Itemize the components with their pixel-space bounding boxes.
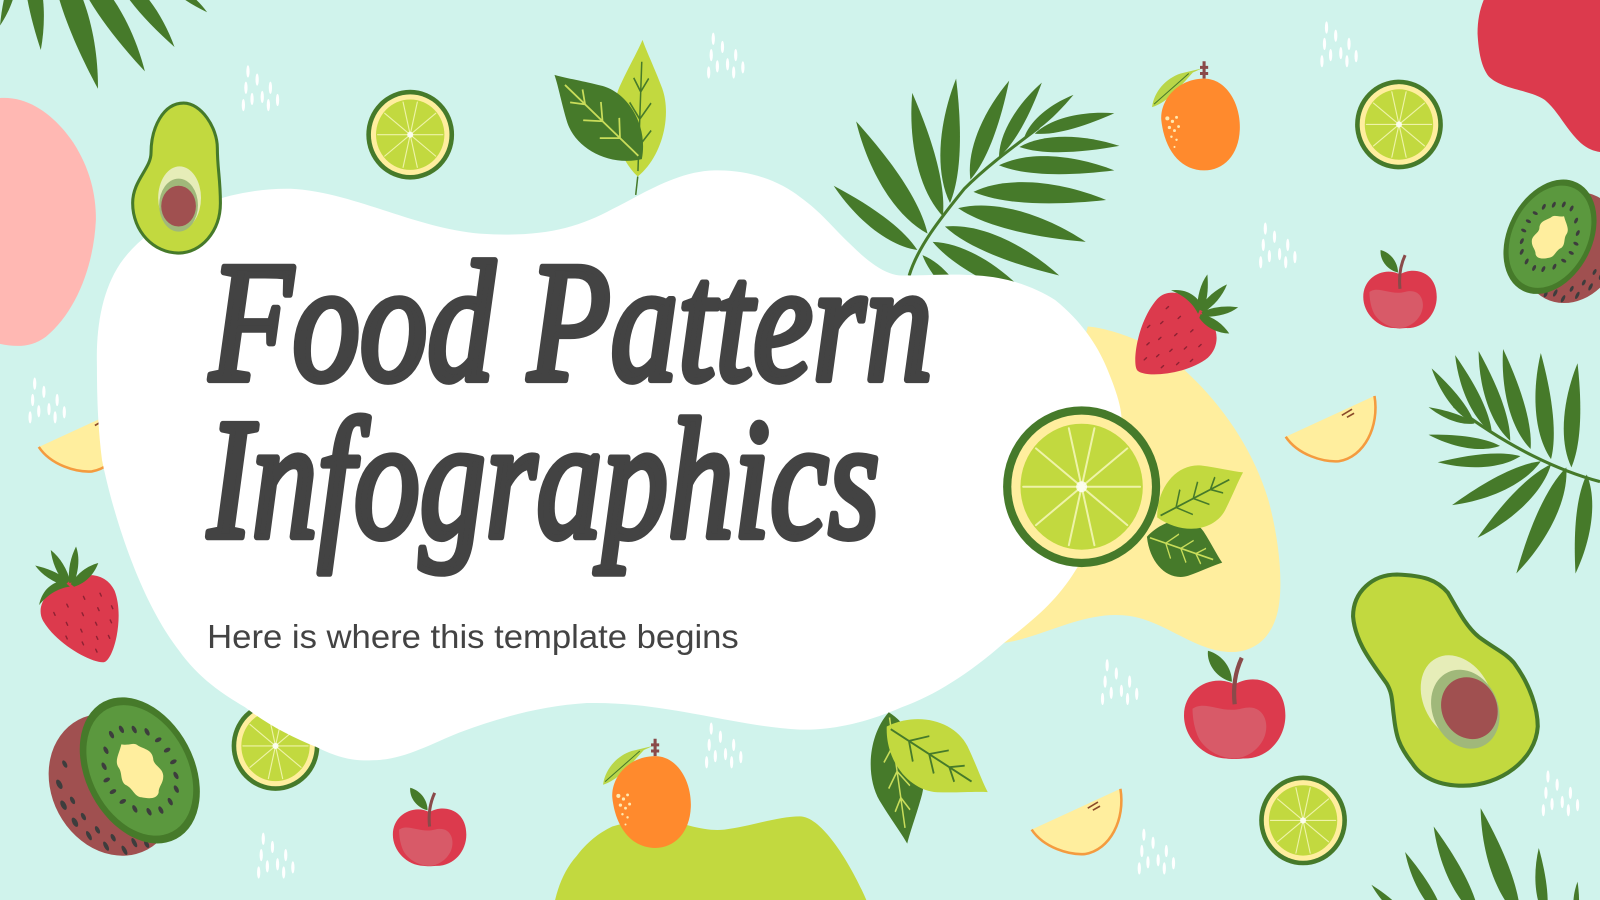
apple: top right	[1363, 250, 1437, 328]
lime: top	[366, 90, 454, 180]
kiwi: bottom left	[22, 677, 224, 882]
avocado: large	[1353, 574, 1538, 786]
title: Infographics	[207, 385, 880, 575]
big lime	[1003, 406, 1160, 567]
blob: red	[1478, 0, 1600, 152]
lime: top right	[1355, 80, 1443, 169]
white title blob	[97, 170, 1122, 760]
leaves: top	[533, 39, 669, 195]
lime: bottom left	[232, 701, 319, 791]
subtitle: Here is where this template begins	[207, 619, 739, 656]
leaves: bottom	[863, 699, 1006, 847]
dot pattern group 5	[1259, 222, 1297, 268]
palm leaf: bottom right	[1368, 806, 1580, 900]
leaf behind big lime	[1138, 510, 1231, 590]
title: Food Pattern	[209, 228, 933, 418]
mango: top	[1152, 61, 1240, 170]
palm leaf: top left	[0, 0, 210, 91]
dot pattern group 9	[1138, 829, 1175, 874]
lime: bottom right	[1259, 776, 1347, 865]
blob: green	[555, 816, 866, 900]
blob: pink	[0, 98, 96, 346]
title	[207, 228, 933, 575]
kiwi: right	[1485, 164, 1600, 323]
apple slice: right	[1286, 396, 1375, 461]
avocado: top left	[133, 103, 220, 253]
mango: bottom	[603, 739, 691, 848]
apple: large	[1184, 651, 1285, 759]
strawberry: centre right	[1111, 257, 1255, 399]
apple: bottom	[393, 788, 466, 866]
leaf beside big lime	[1143, 445, 1257, 545]
dot pattern group 10	[1542, 770, 1579, 816]
blob: yellow	[1004, 327, 1280, 652]
palm leaf: centre	[827, 77, 1119, 319]
dot pattern group 7	[705, 722, 742, 768]
dot pattern group 6	[257, 833, 294, 879]
strawberry: left	[17, 533, 140, 678]
apple slice: left	[39, 406, 129, 472]
dot pattern group 4	[1320, 21, 1358, 67]
palm leaf: right	[1426, 347, 1600, 578]
dot pattern group 2	[707, 33, 744, 79]
dot pattern group 1	[242, 65, 279, 111]
apple slice: bottom	[1032, 789, 1121, 854]
dot pattern group 3	[28, 378, 66, 423]
dot pattern group 8	[1101, 659, 1138, 705]
